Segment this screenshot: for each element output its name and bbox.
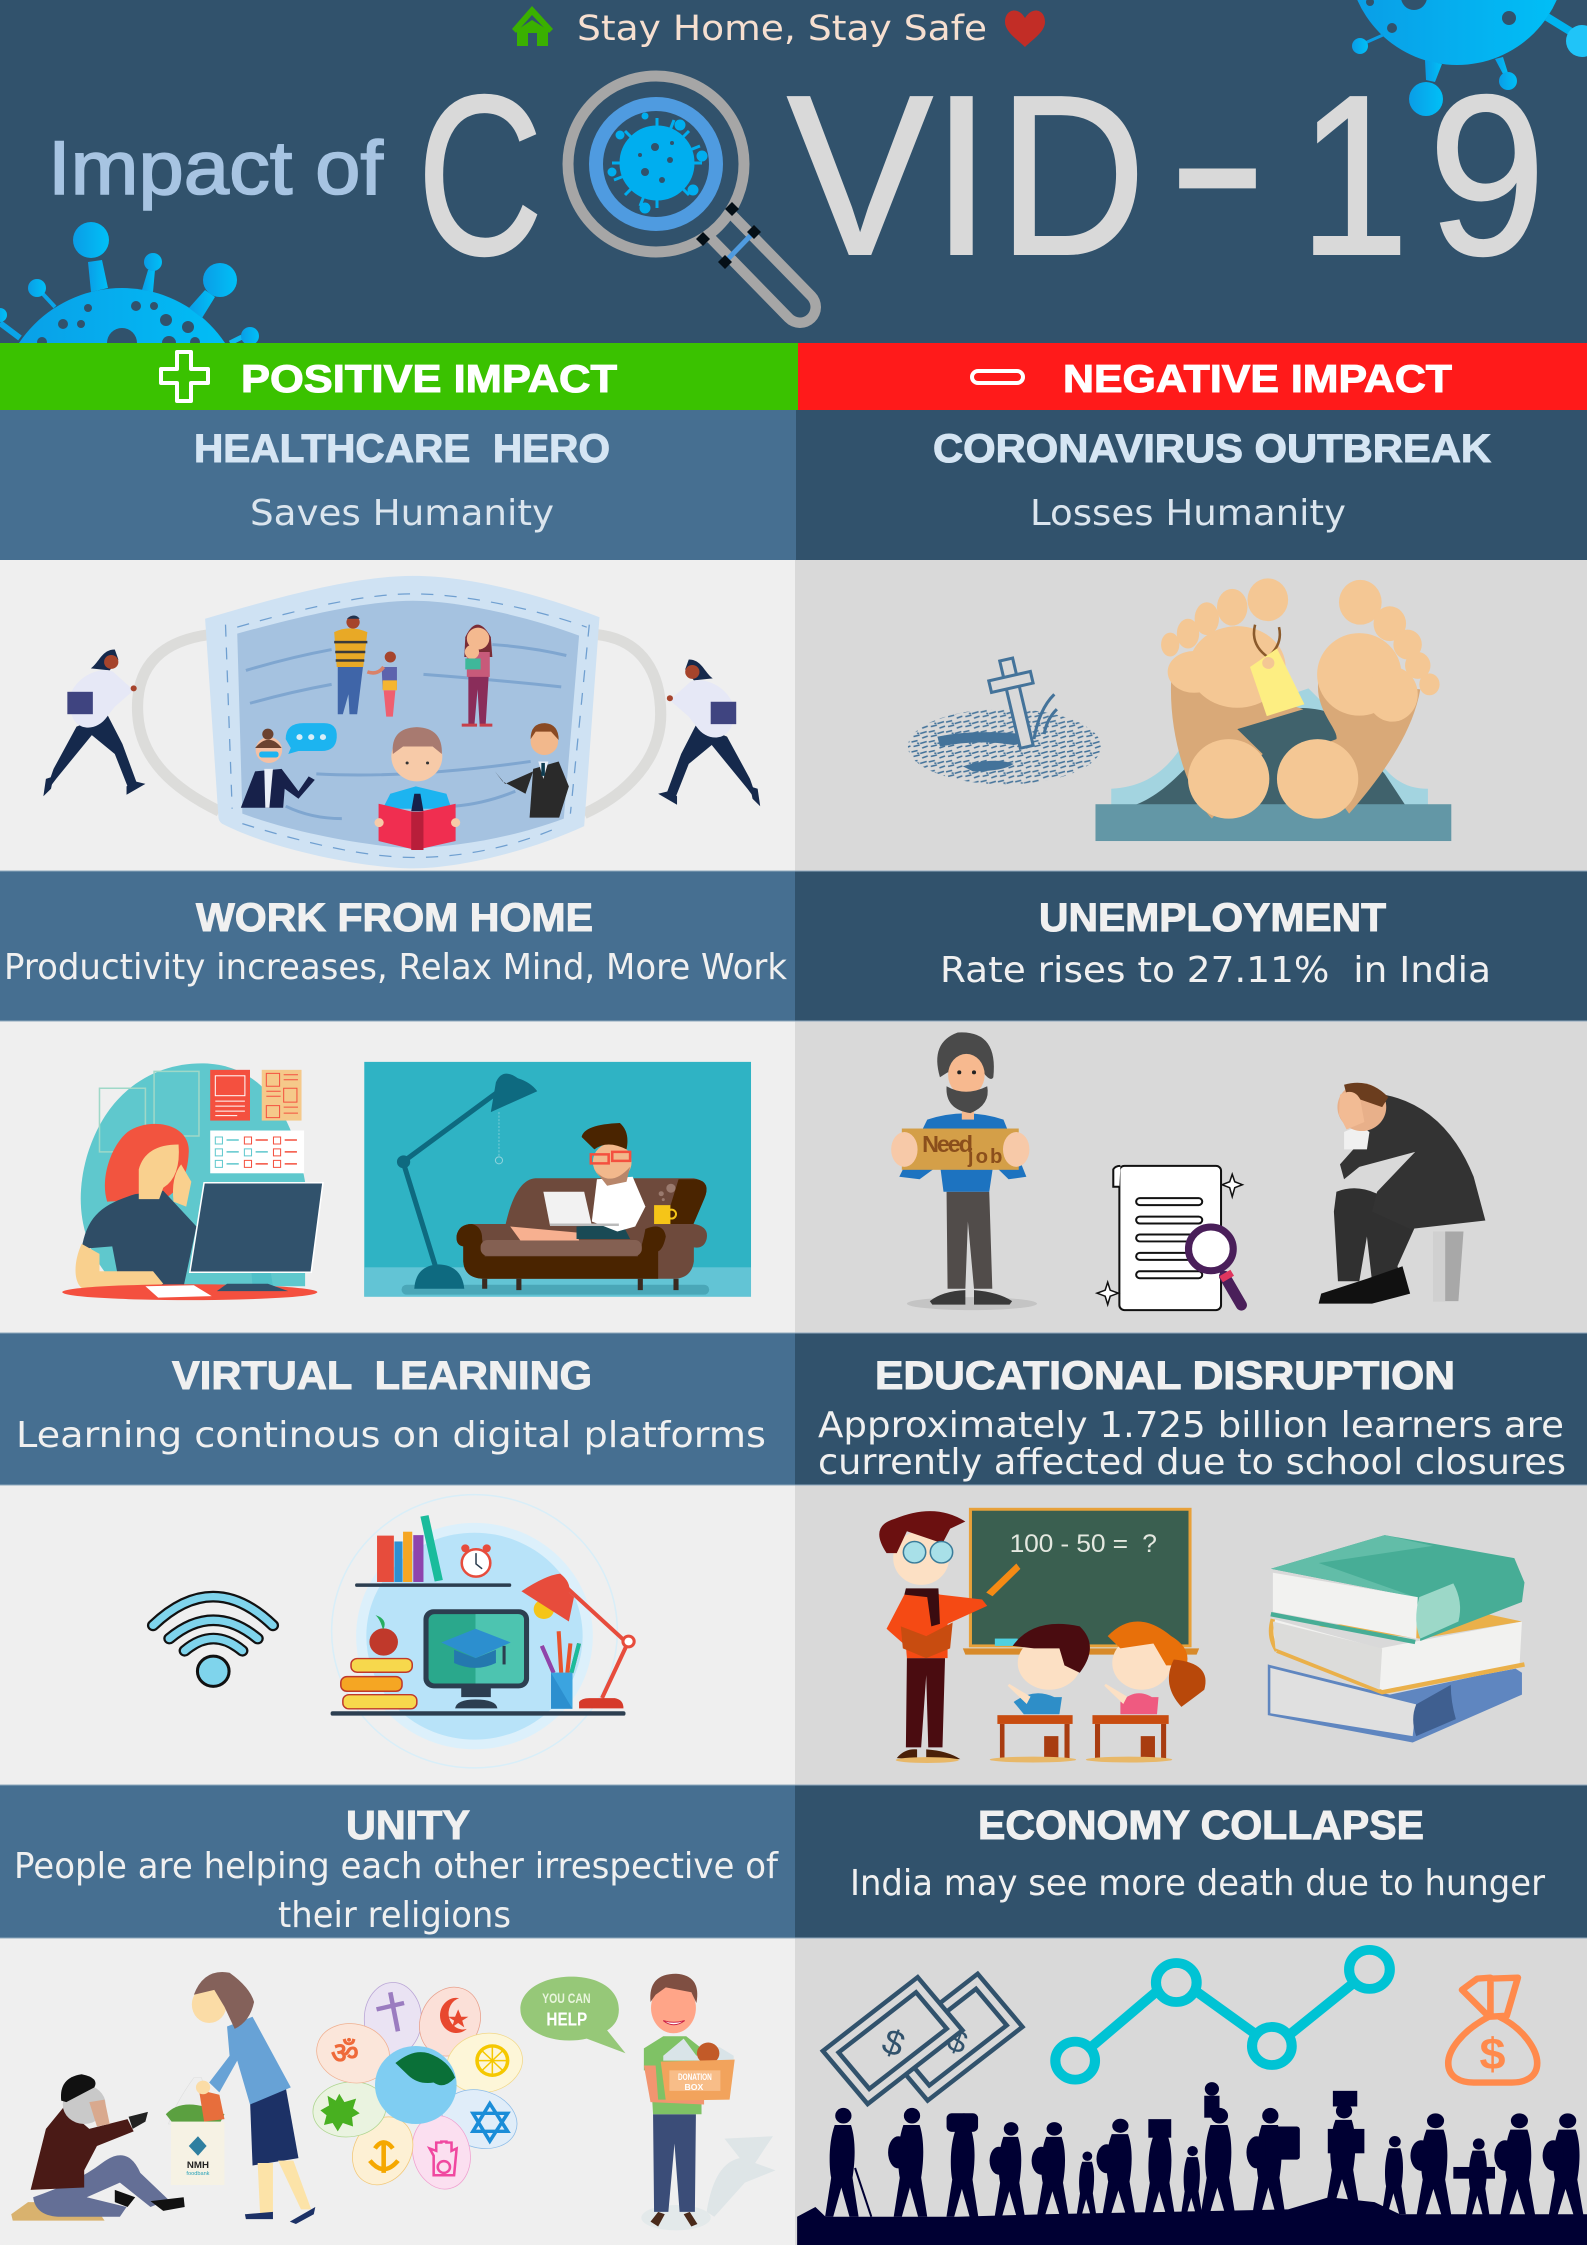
- icon: banknotes: [823, 1974, 1022, 2104]
- panel: educational disruption heading: [795, 1333, 1587, 1485]
- panel: unity heading: their religions: [278, 1895, 511, 1936]
- illustration: online learning desk: [331, 1495, 634, 1768]
- illustrations: left column rows 3-4: [11, 1495, 776, 2230]
- chart: cyan line graph: [1055, 1950, 1390, 2080]
- icon: boy at desk: [990, 1624, 1090, 1762]
- title: COVID-19: 9: [1428, 49, 1546, 303]
- text: dollar signs: $: [877, 2021, 910, 2065]
- heading: positive impact: POSITIVE IMPACT: [241, 358, 617, 401]
- icon: woman giving food: [192, 1972, 315, 2224]
- icon: virus bottom left: [0, 222, 259, 536]
- title: COVID-19: [417, 34, 1546, 303]
- panel: coronavirus outbreak heading: Losses Humanity: [1030, 493, 1346, 534]
- icon: girl at desk: [1086, 1621, 1206, 1762]
- panel: economy collapse heading: [795, 1785, 1587, 1938]
- tagline: Stay Home, Stay Safe: [577, 9, 987, 49]
- heading: negative impact: NEGATIVE IMPACT: [1063, 358, 1452, 401]
- icon: speech bubble you can help: HELP: [546, 2010, 587, 2030]
- panel: unemployment heading: [795, 871, 1587, 1021]
- icon: woman with speech bubble: [241, 723, 337, 808]
- text: sum on chalkboard: 100 - 50 = ?: [1010, 1531, 1157, 1558]
- title: COVID-19: -: [1167, 34, 1268, 288]
- icon: money bag: [1448, 1978, 1537, 2083]
- icon: man holding need job sign: [891, 1032, 1037, 1310]
- panel: unity heading: People are helping each other irrespective of: [14, 1846, 779, 1887]
- icon: boy with donation box: [641, 1974, 776, 2230]
- icon: magnifying glass with virus: [568, 76, 800, 307]
- icon: money bag: $: [1479, 2029, 1505, 2079]
- panel: work from home heading: Productivity increases, Relax Mind, More Work: [4, 947, 787, 988]
- icon: house: [512, 6, 553, 46]
- icon: doctor left: [43, 650, 145, 796]
- icon: resume with magnifier: [1097, 1166, 1242, 1310]
- panel: work from home heading: WORK FROM HOME: [196, 896, 593, 940]
- panel: virtual learning heading: Learning continous on digital platforms: [16, 1415, 766, 1456]
- panel: virtual learning heading: [0, 1333, 795, 1485]
- illustration: silhouettes of migrants walking: [797, 2082, 1587, 2245]
- panel: educational disruption heading: Approximately 1.725 billion learners are: [818, 1405, 1564, 1446]
- panel: unemployment heading: UNEMPLOYMENT: [1039, 896, 1386, 940]
- icon: man begging seated: [11, 2074, 185, 2221]
- illustrations: left column rows 1-2: [43, 576, 760, 1300]
- illustration: chalkboard: [963, 1509, 1199, 1655]
- icon: father and daughter: [334, 615, 397, 717]
- icon: man reading book: [374, 727, 460, 850]
- panel: economy collapse heading: India may see more death due to hunger: [850, 1863, 1545, 1904]
- title: COVID-19: C: [417, 49, 543, 303]
- title: COVID-19: I: [931, 49, 992, 303]
- panel: healthcare hero heading: Saves Humanity: [250, 493, 554, 534]
- header band: negative impact: [798, 343, 1587, 410]
- icon: mother and child: [462, 625, 492, 725]
- panel: educational disruption heading: currently affected due to school closures: [818, 1442, 1566, 1483]
- icon: stack of books: [1268, 1535, 1524, 1742]
- icon: boy with donation box: BOX: [684, 2082, 704, 2092]
- title: COVID-19: D: [998, 49, 1146, 303]
- panel: healthcare hero heading: [0, 410, 796, 560]
- title: COVID-19: V: [787, 49, 933, 303]
- icon: plus: [161, 352, 208, 401]
- panel: unity heading: [0, 1785, 795, 1938]
- icon: food bag: NMH: [187, 2160, 209, 2171]
- panel: healthcare hero heading: HEALTHCARE HERO: [194, 427, 610, 471]
- illustrations: right column rows 3-4: [797, 1509, 1587, 2245]
- icon: food bag: foodbank: [186, 2171, 210, 2177]
- icon: face mask with people: [138, 576, 661, 868]
- illustration: woman at computer: [62, 1063, 323, 1300]
- panel: work from home heading: [0, 871, 795, 1021]
- icon: minus: [972, 371, 1023, 383]
- icon: food bag: [166, 2078, 224, 2185]
- panel: educational disruption heading: EDUCATIONAL DISRUPTION: [875, 1354, 1455, 1398]
- panel: virtual learning heading: VIRTUAL LEARNING: [172, 1354, 592, 1398]
- panel: economy collapse heading: ECONOMY COLLAPSE: [978, 1802, 1424, 1848]
- icon: boy with donation box: DONATION: [678, 2072, 712, 2083]
- illustrations: right column rows 1-2: [891, 578, 1485, 1310]
- icon: teacher: [879, 1511, 1019, 1763]
- icon: banknotes: $: [943, 2022, 973, 2061]
- panel: unemployment heading: Rate rises to 27.11% in India: [940, 950, 1491, 991]
- icon: heart: [1005, 10, 1045, 47]
- icon: man holding need job sign: Need: [922, 1131, 973, 1157]
- illustration: man with laptop on sofa: [364, 1062, 751, 1297]
- header background: [0, 0, 1587, 343]
- icon: religious symbols flower: ॐ: [331, 2037, 359, 2071]
- icon: man in suit pointing: [495, 723, 569, 818]
- icon: speech bubble you can help: YOU CAN: [542, 1991, 591, 2007]
- panel: unity heading: UNITY: [346, 1802, 470, 1848]
- icon: religious symbols flower: [308, 1979, 530, 2194]
- panel: coronavirus outbreak heading: CORONAVIRUS OUTBREAK: [933, 427, 1491, 471]
- icon: man holding need job sign: job: [967, 1146, 1002, 1168]
- icon: virus top right: [1348, 0, 1587, 116]
- icon: speech bubble you can help: [520, 1977, 626, 2053]
- panel backgrounds: [0, 560, 1587, 2245]
- icon: wifi: [153, 1597, 273, 1686]
- icon: body feet on slab with toe tag: [1095, 578, 1451, 841]
- title: impact of: Impact of: [48, 126, 384, 211]
- icon: doctor right: [658, 659, 760, 806]
- title: COVID-19: 1: [1299, 49, 1409, 303]
- panel: coronavirus outbreak heading: [796, 410, 1587, 559]
- icon: depressed businessman on stool: [1319, 1083, 1485, 1304]
- header band: positive impact: [0, 343, 798, 410]
- icon: grave with cross: [908, 655, 1101, 784]
